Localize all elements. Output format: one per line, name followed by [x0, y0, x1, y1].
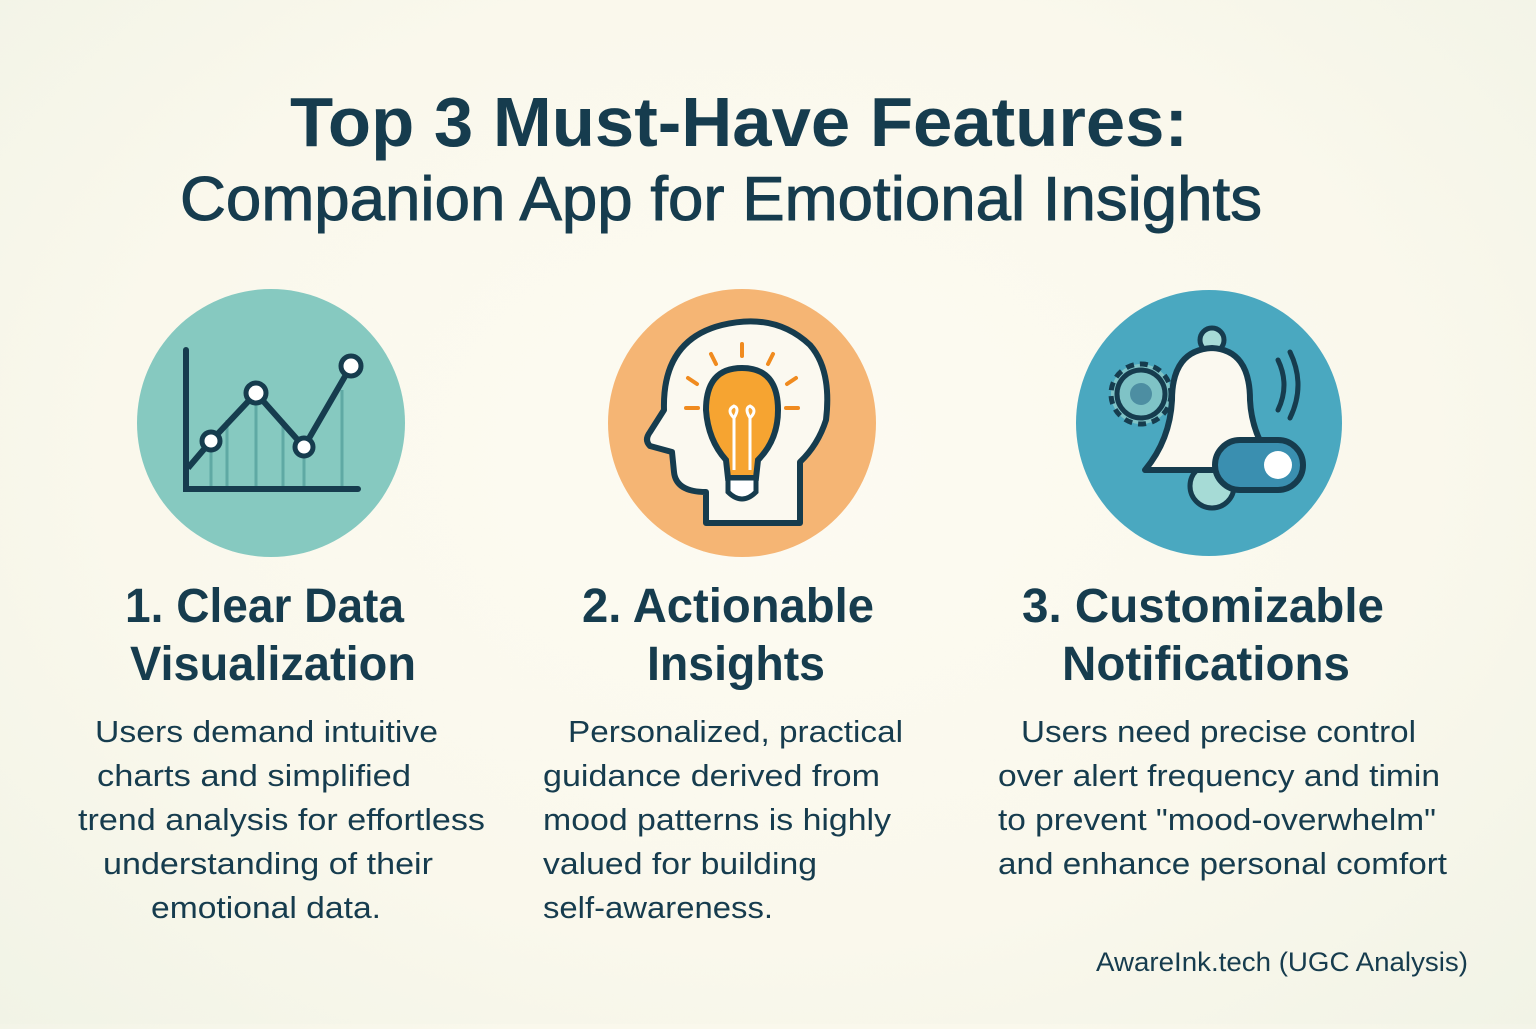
text: feature 3 description: over alert frequency and timin: [998, 758, 1440, 793]
text: feature 2 description: Personalized, practical: [568, 714, 903, 749]
heading: feature 1: Visualization: [130, 638, 416, 691]
text: feature 1 description: Users demand intuitive: [95, 714, 438, 749]
heading: feature 1: [125, 580, 416, 691]
text: feature 1 description: charts and simplified: [97, 758, 411, 793]
icon: chart circle: [137, 289, 405, 557]
text: feature 1 description: trend analysis for effortless: [78, 802, 485, 837]
text: feature 2 description: guidance derived from: [543, 758, 880, 793]
text: feature 3 description: Users need precise control: [1021, 714, 1416, 749]
title: [180, 83, 1262, 234]
icon: head with lightbulb: [608, 289, 876, 557]
text: feature 1 description: emotional data.: [151, 890, 381, 925]
heading: feature 1: 1. Clear Data: [125, 580, 404, 633]
footer source: AwareInk.tech (UGC Analysis): [1096, 947, 1468, 977]
icon: bell with gear and toggle: [1076, 290, 1342, 556]
title: Top 3 Must-Have Features:: [290, 83, 1188, 161]
heading: feature 2: Insights: [647, 638, 825, 691]
text: feature 1 description: [78, 714, 485, 925]
text: feature 2 description: self-awareness.: [543, 890, 773, 925]
text: feature 2 description: [543, 714, 903, 925]
text: feature 3 description: and enhance personal comfort: [998, 846, 1447, 881]
text: feature 1 description: understanding of their: [103, 846, 433, 881]
text: feature 2 description: mood patterns is highly: [543, 802, 892, 837]
text: feature 3 description: [998, 714, 1447, 881]
heading: feature 2: [582, 580, 874, 691]
heading: feature 3: [1022, 580, 1384, 691]
heading: feature 3: 3. Customizable: [1022, 580, 1384, 633]
heading: feature 3: Notifications: [1062, 638, 1350, 691]
title: Companion App for Emotional Insights: [180, 165, 1262, 234]
text: feature 3 description: to prevent "mood-overwhelm": [998, 802, 1436, 837]
text: feature 2 description: valued for building: [543, 846, 817, 881]
heading: feature 2: 2. Actionable: [582, 580, 874, 633]
